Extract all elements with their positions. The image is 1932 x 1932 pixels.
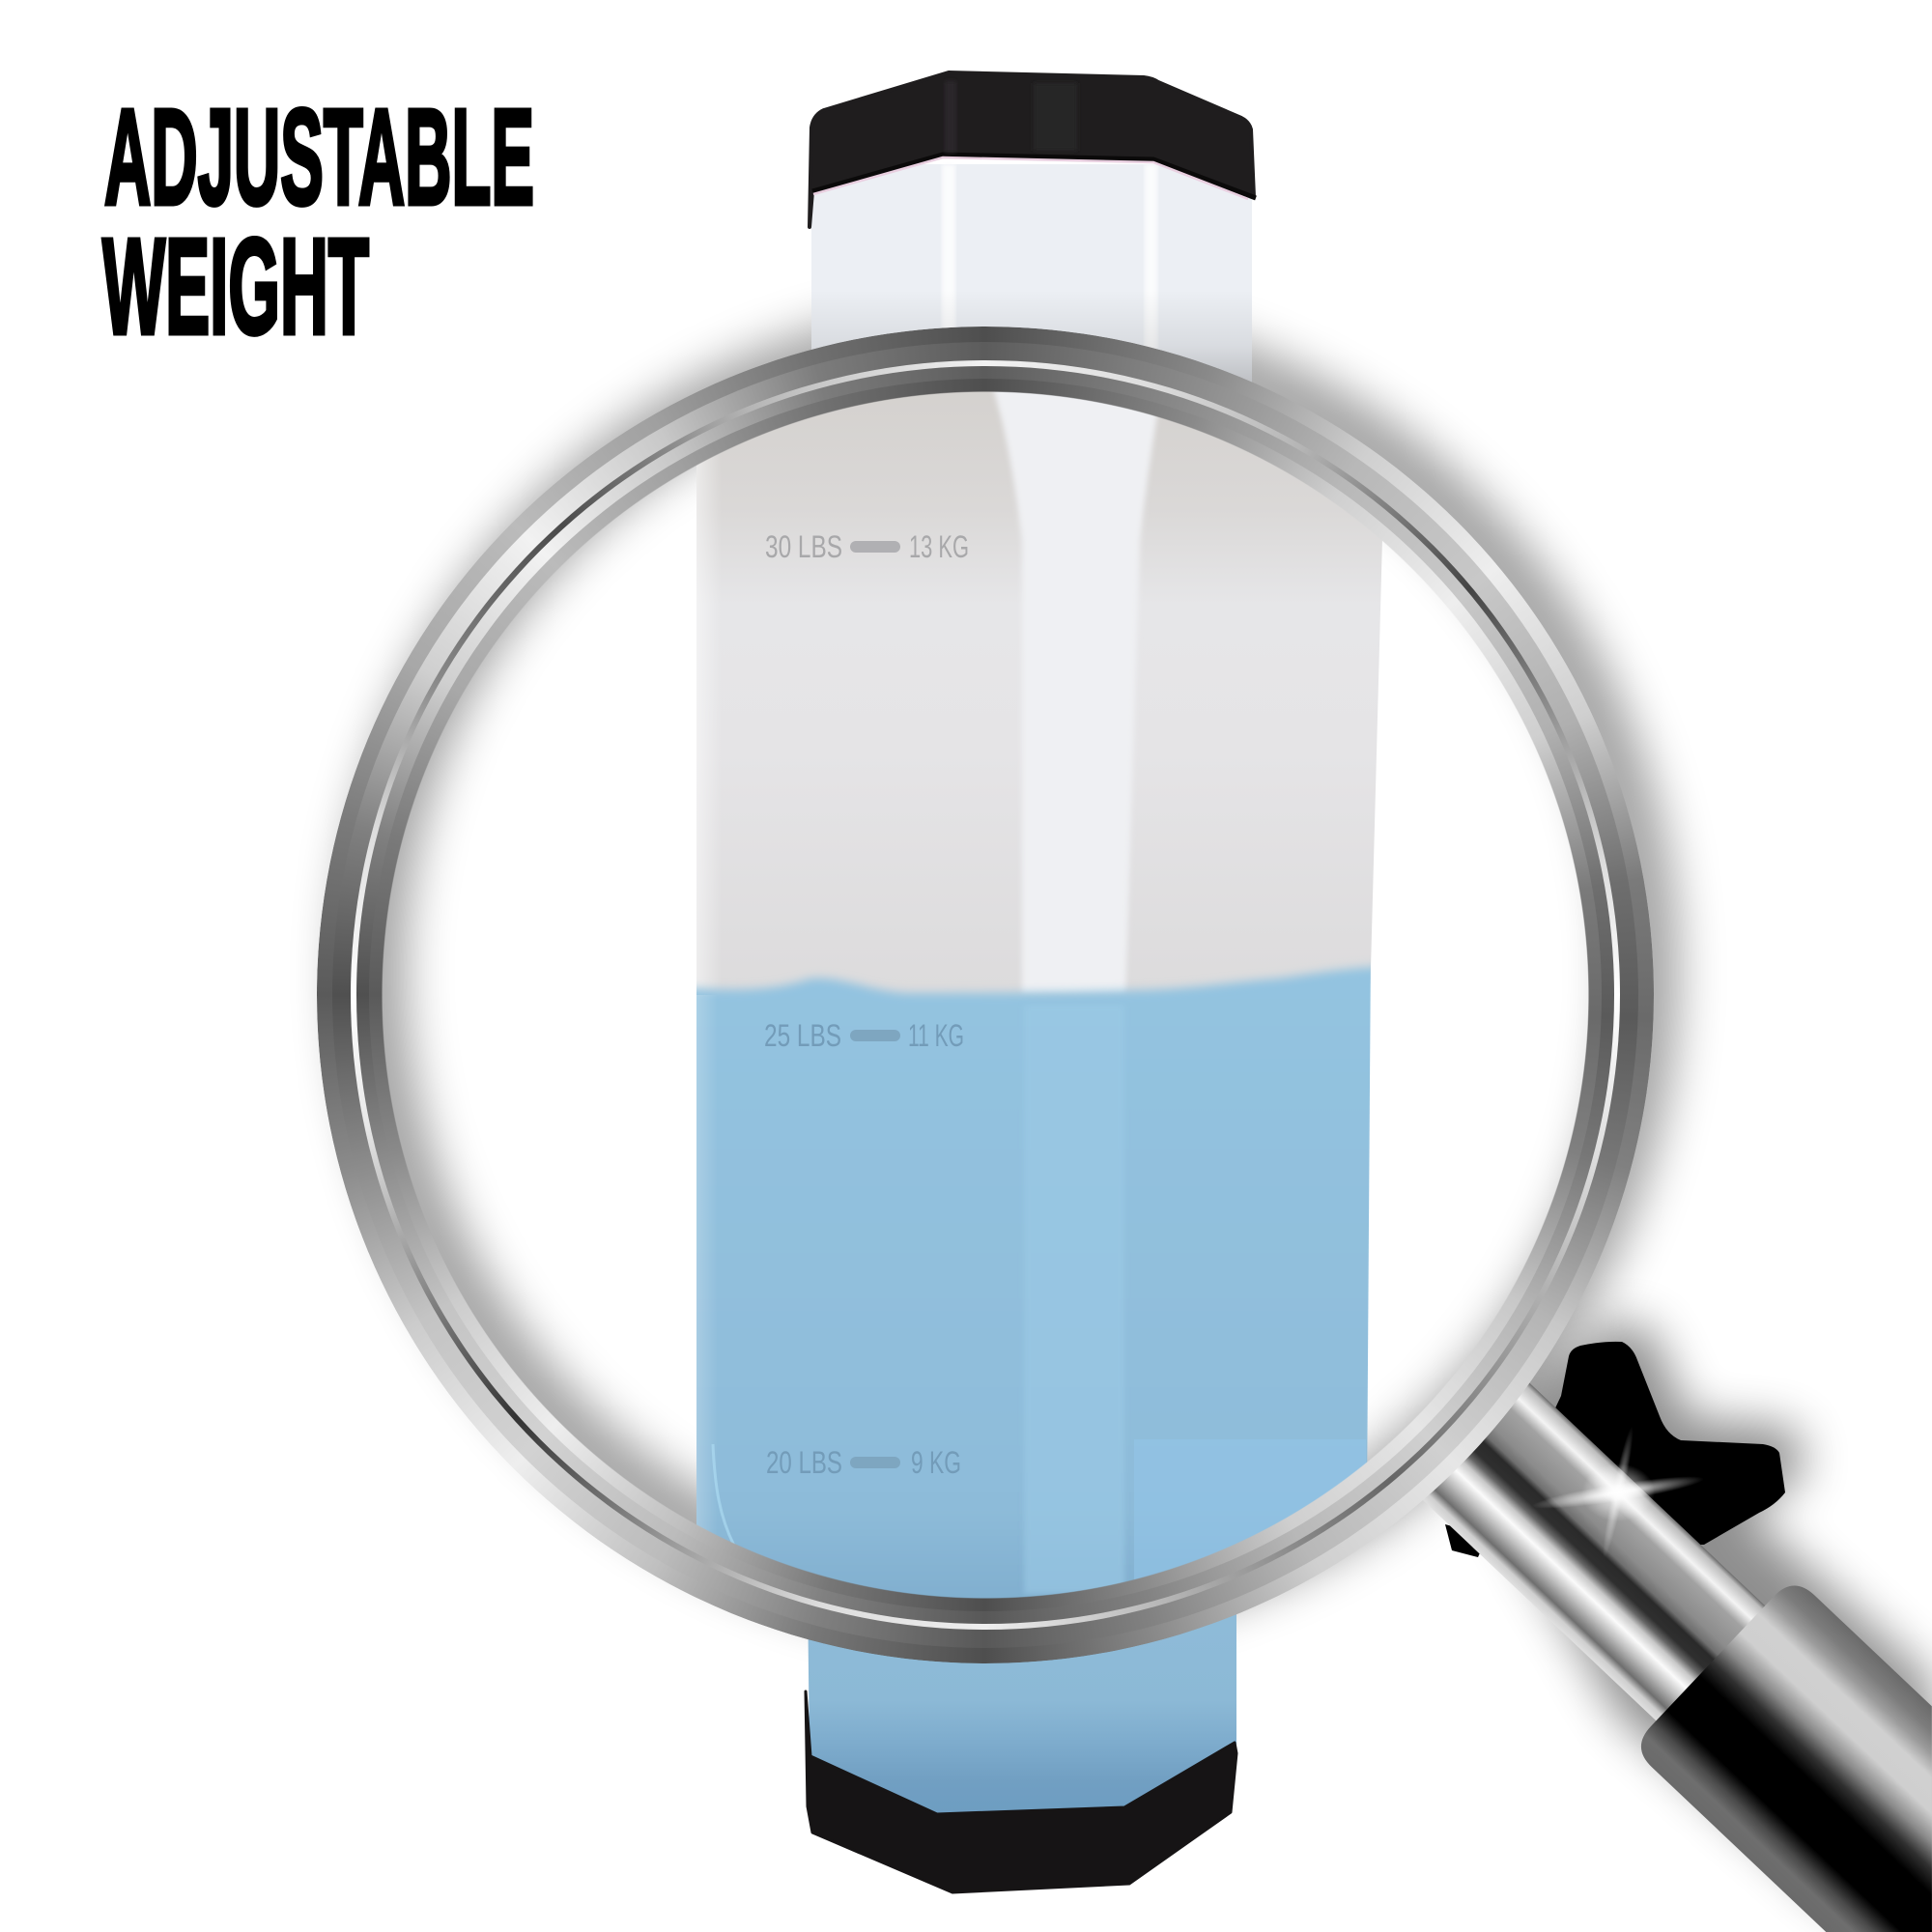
30 lbs mark: 13 KG xyxy=(909,529,969,564)
25 lbs mark xyxy=(765,1024,962,1047)
upper bottle body xyxy=(811,164,1252,415)
20 lbs mark: 20 LBS xyxy=(766,1445,842,1480)
magnified bottle air section xyxy=(696,377,1383,1005)
title: WEIGHT xyxy=(102,210,369,362)
sparkle highlight xyxy=(1531,1425,1705,1560)
blue water section xyxy=(696,962,1371,1598)
top black cap xyxy=(810,72,1256,227)
bottom black cap xyxy=(806,1691,1236,1892)
handle shadow xyxy=(1463,1322,1932,1908)
25 lbs mark: 25 LBS xyxy=(764,1018,841,1053)
inner edge band xyxy=(369,379,1602,1611)
edge highlights xyxy=(696,458,712,989)
lens with magnified bottle xyxy=(696,392,1382,1598)
25 lbs mark: 11 KG xyxy=(908,1018,964,1053)
main outer band xyxy=(332,342,1638,1648)
lower bottle body xyxy=(808,1584,1236,1816)
water centre strip xyxy=(1024,1445,1124,1594)
metal rod and grip xyxy=(1378,1337,1932,1932)
water left edge light xyxy=(696,995,711,1532)
title: ADJUSTABLE xyxy=(104,80,534,233)
main inner band xyxy=(356,366,1614,1624)
centre highlight strip xyxy=(989,377,1164,995)
20 lbs mark xyxy=(767,1451,960,1474)
20 lbs mark: 9 KG xyxy=(911,1445,961,1480)
30 lbs mark: 30 LBS xyxy=(765,529,842,564)
lower left light edge xyxy=(713,1444,734,1546)
magnifying glass metal ring xyxy=(317,327,1654,1663)
30 lbs mark xyxy=(766,535,968,558)
outer edge band xyxy=(317,327,1654,1663)
knob xyxy=(1445,1342,1785,1557)
lower right light panel xyxy=(1134,1490,1329,1579)
thin groove line xyxy=(351,360,1620,1630)
